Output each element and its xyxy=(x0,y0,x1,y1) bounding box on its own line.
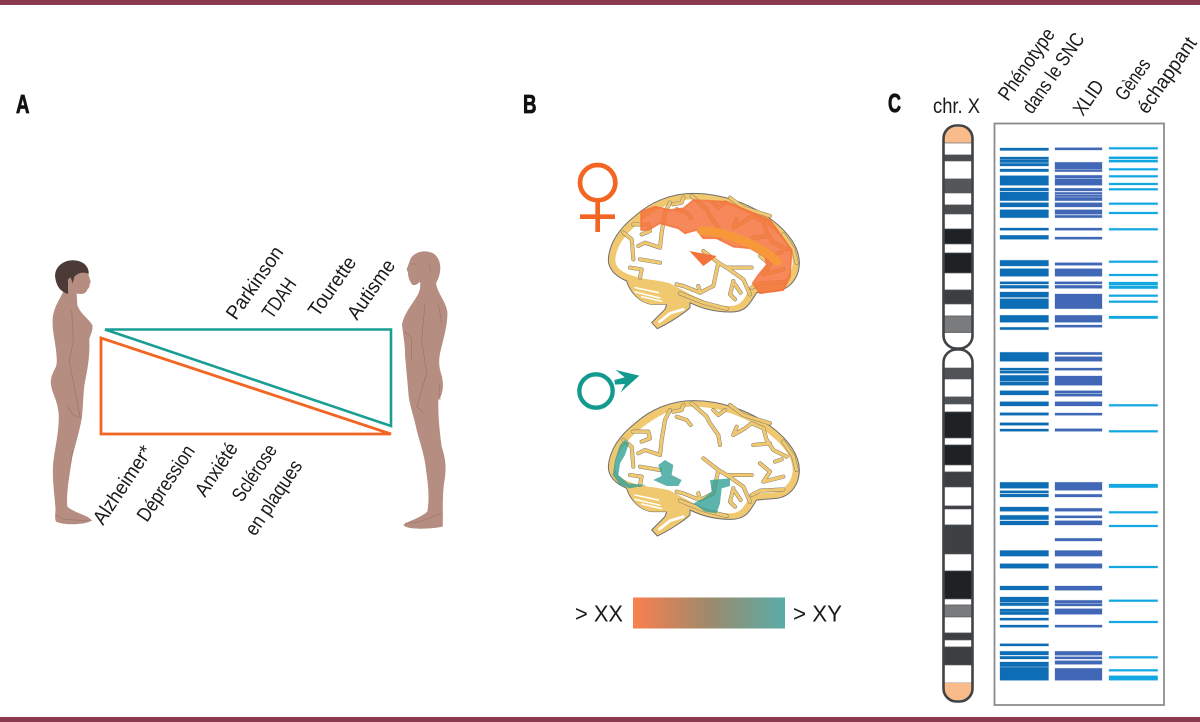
legend: XX to XY gradient: > XX xyxy=(575,600,623,626)
gene map frame xyxy=(994,124,1164,705)
labels: male-biased disorders xyxy=(222,242,400,324)
heading C: C xyxy=(888,88,901,118)
labels: male-biased disorders: Parkinson xyxy=(222,242,288,324)
labels: female-biased disorders: Anxiété xyxy=(191,439,243,501)
labels: female-biased disorders: en plaques xyxy=(241,456,307,540)
icon: female symbol xyxy=(580,165,615,232)
label: chr. X: chr. X xyxy=(933,95,980,118)
labels: female-biased disorders: Alzheimer* xyxy=(89,442,158,529)
labels: female-biased disorders xyxy=(89,439,307,540)
legend: XX to XY gradient xyxy=(575,598,842,628)
panel A: sex-biased disorders xyxy=(16,89,447,540)
triangle: female-biased xyxy=(101,338,391,434)
triangle: male-biased xyxy=(105,330,391,426)
icon: male body xyxy=(402,251,447,529)
labels: male-biased disorders: Autisme xyxy=(343,256,400,324)
labels: male-biased disorders: Tourette xyxy=(304,253,361,321)
column: XLID genes xyxy=(1055,148,1102,680)
labels: female-biased disorders: Sclérose xyxy=(228,440,282,506)
column headers: XLID xyxy=(1069,76,1109,120)
panel B: brain differences xyxy=(523,89,842,628)
heading B: B xyxy=(523,89,536,119)
bottom border xyxy=(0,717,1200,722)
column headers: dans le SNC xyxy=(1018,29,1089,118)
icon: male symbol xyxy=(579,370,639,408)
panel C: X chromosome map xyxy=(888,24,1200,705)
column: escape genes xyxy=(1109,147,1158,680)
column headers xyxy=(994,24,1200,120)
labels: male-biased disorders: TDAH xyxy=(258,274,301,323)
column headers: Gènes xyxy=(1111,55,1155,105)
brain: female with orange regions xyxy=(608,193,799,329)
column headers: Phénotype xyxy=(994,24,1060,105)
brain: male with teal regions xyxy=(608,401,799,536)
column: CNS phenotype genes xyxy=(1000,148,1048,680)
labels: female-biased disorders: Dépression xyxy=(133,441,200,526)
top border xyxy=(0,0,1200,5)
legend: XX to XY gradient: > XY xyxy=(793,600,842,626)
heading A: A xyxy=(16,89,30,119)
icon: female body xyxy=(51,260,92,524)
chromosome X ideogram xyxy=(943,125,973,703)
